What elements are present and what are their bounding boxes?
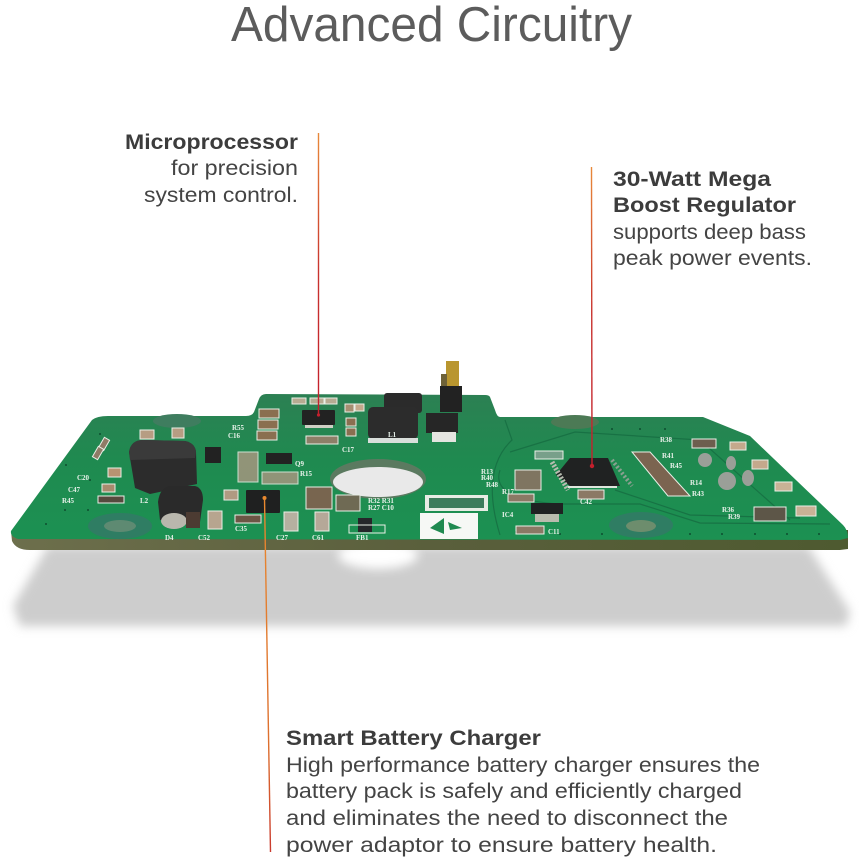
callout: 30-watt mega boost regulator: Boost Regulator — [613, 194, 796, 217]
IC4 chip — [531, 503, 563, 522]
silkscreen labels: C52 — [198, 534, 211, 542]
callout: 30-watt mega boost regulator: 30-Watt Mega — [613, 168, 771, 191]
silkscreen labels: C35 — [235, 525, 248, 533]
transistor D5 — [426, 413, 458, 433]
circuit board — [11, 361, 848, 550]
silkscreen labels: R55 — [232, 424, 245, 432]
silkscreen labels: R48 — [486, 481, 499, 489]
callout: smart battery charger: High performance battery charger ensures the — [286, 754, 760, 777]
leader line: microprocessor — [317, 133, 320, 417]
battery charger chip — [246, 490, 280, 513]
silkscreen labels: C11 — [548, 528, 560, 536]
silkscreen labels: C27 — [276, 534, 289, 542]
callout: microprocessor: Microprocessor — [125, 131, 298, 154]
silkscreen labels: R27 C10 — [368, 504, 394, 512]
silkscreen labels: R32 R31 — [368, 497, 394, 505]
circuit traces — [492, 420, 830, 535]
QR label — [425, 495, 488, 511]
logo label — [420, 513, 478, 539]
leader line: battery charger — [262, 496, 270, 852]
silkscreen labels: C16 — [228, 432, 241, 440]
board centre hole — [330, 459, 426, 499]
silkscreen labels: R45 — [62, 497, 75, 505]
components, right — [508, 439, 816, 534]
silkscreen labels: R40 — [481, 474, 494, 482]
silkscreen labels: L2 — [140, 497, 149, 505]
leader line: boost regulator — [590, 167, 594, 468]
silkscreen labels: Q9 — [295, 460, 304, 468]
silkscreen labels: C17 — [342, 446, 355, 454]
silkscreen labels: R41 — [662, 452, 675, 460]
silkscreen labels: R43 — [692, 490, 705, 498]
silkscreen labels: IC4 — [502, 511, 514, 519]
board surface — [11, 394, 848, 540]
small components, left — [92, 428, 385, 533]
callout: smart battery charger: power adaptor to ensure battery health. — [286, 834, 717, 857]
silkscreen labels: C42 — [580, 498, 593, 506]
silkscreen labels: R13 — [481, 468, 494, 476]
inductor L1 — [368, 393, 422, 443]
callout: 30-watt mega boost regulator — [613, 168, 812, 270]
silkscreen labels: R38 — [660, 436, 673, 444]
board edge — [11, 530, 848, 550]
silkscreen labels: R36 — [722, 506, 735, 514]
callout: microprocessor: for precision — [171, 157, 298, 180]
microprocessor chip — [302, 410, 335, 428]
silkscreen labels: R15 — [300, 470, 313, 478]
silkscreen labels: R39 — [728, 513, 741, 521]
capacitor rows near microprocessor — [257, 398, 364, 444]
silkscreen labels: C20 — [77, 474, 90, 482]
inductor L2 — [129, 440, 197, 494]
boost regulator chip — [552, 458, 632, 490]
silkscreen labels: R17 — [502, 488, 515, 496]
through-hole solder points — [698, 453, 754, 490]
silkscreen labels: R45 — [670, 462, 683, 470]
silkscreen labels: R14 — [690, 479, 703, 487]
silkscreen labels: C61 — [312, 534, 325, 542]
silkscreen labels: L1 — [388, 431, 397, 439]
callout: 30-watt mega boost regulator: peak power events. — [613, 247, 812, 270]
callout: smart battery charger — [286, 727, 760, 857]
silkscreen labels: FB1 — [356, 534, 369, 542]
callout: smart battery charger: battery pack is safely and efficiently charged — [286, 780, 742, 803]
connector pin — [440, 361, 462, 412]
silkscreen labels: D4 — [165, 534, 174, 542]
callout: 30-watt mega boost regulator: supports deep bass — [613, 221, 806, 244]
callout: microprocessor — [125, 131, 298, 207]
silkscreen labels — [62, 424, 741, 542]
mounting holes — [88, 414, 673, 539]
callout: smart battery charger: and eliminates the need to disconnect the — [286, 807, 728, 830]
board shadow — [13, 541, 850, 626]
silkscreen labels: C47 — [68, 486, 81, 494]
via dots — [45, 428, 820, 535]
callout: smart battery charger: Smart Battery Charger — [286, 727, 541, 750]
callout: microprocessor: system control. — [144, 184, 298, 207]
inductor D4 — [158, 486, 203, 529]
